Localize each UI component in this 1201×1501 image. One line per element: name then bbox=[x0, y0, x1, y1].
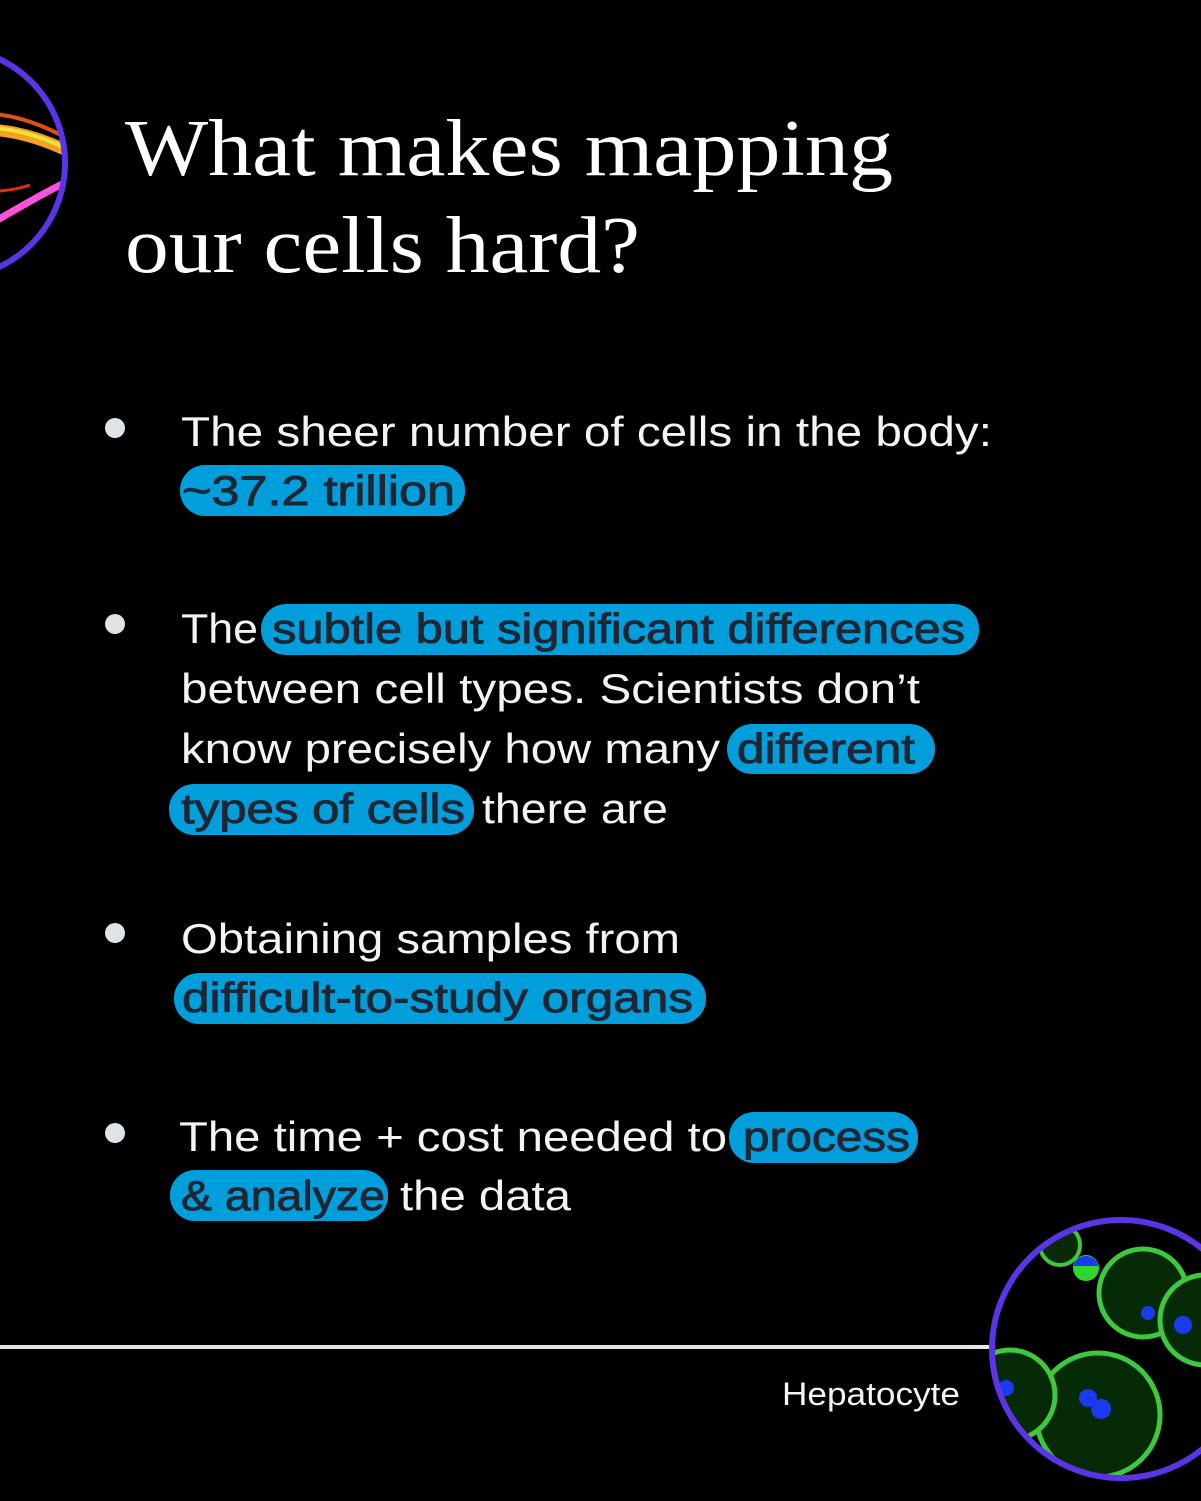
title bbox=[125, 105, 893, 290]
bullet 4: The time + cost needed to bbox=[179, 1113, 727, 1160]
bullet 4: the data bbox=[400, 1172, 572, 1219]
bullet 2: The bbox=[181, 605, 258, 652]
icon: top-left microscopy circle bbox=[0, 56, 68, 270]
bullet 2 bbox=[105, 604, 979, 835]
caption: Hepatocyte: Hepatocyte bbox=[782, 1376, 960, 1412]
bullet 2: between cell types. Scientists don’t bbox=[181, 665, 920, 712]
bullet 4: process bbox=[743, 1113, 910, 1160]
bullet 1 bbox=[105, 408, 992, 516]
bullet 4 bbox=[105, 1112, 918, 1221]
bullet 3: Obtaining samples from bbox=[181, 915, 680, 962]
bullet 2: subtle but significant differences bbox=[272, 605, 965, 652]
bullet 3 bbox=[105, 915, 706, 1024]
bullet 2: know precisely how many bbox=[181, 725, 720, 772]
bullet 1: ~37.2 trillion bbox=[182, 467, 455, 514]
bullet 3: difficult-to-study organs bbox=[182, 974, 693, 1021]
icon: hepatocyte microscopy circle bbox=[965, 1218, 1201, 1480]
bullet 2: types of cells bbox=[181, 785, 465, 832]
bullet 1: The sheer number of cells in the body: bbox=[181, 408, 992, 455]
title: What makes mapping bbox=[125, 105, 893, 193]
bullet 2: there are bbox=[482, 785, 668, 832]
bullet 4: & analyze bbox=[181, 1172, 385, 1219]
bullet 2: different bbox=[737, 725, 915, 772]
title: our cells hard? bbox=[125, 202, 640, 290]
